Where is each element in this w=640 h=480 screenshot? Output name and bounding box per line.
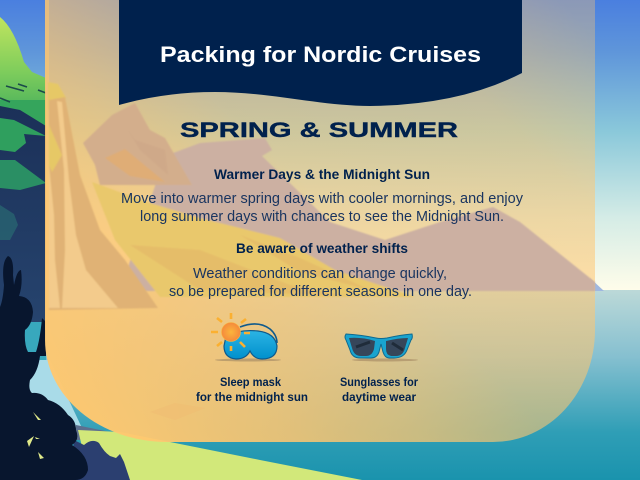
caption: sleep mask [196,375,308,404]
body text: weather: so be prepared for different seasons in one day. [169,283,472,300]
translucent content panel [45,0,595,442]
dock reflection [150,403,205,420]
body text: weather [169,265,472,300]
body text: warmer days [121,190,523,225]
title banner [119,0,522,106]
panel left edge [45,0,49,330]
caption: sunglasses: Sunglasses for [340,375,418,389]
body text: weather: Weather conditions can change quickly, [193,265,447,282]
text block: midnight sun [121,166,523,225]
far shoreline [76,425,110,440]
sea [0,290,640,480]
text block: weather shifts [169,240,472,300]
section heading: SPRING & SUMMER [180,119,458,142]
subheading: warmer days: Warmer Days & the Midnight Sun [214,166,430,182]
caption: sunglasses [340,375,418,404]
caption: sunglasses: daytime wear [342,390,416,404]
caption: sleep mask: for the midnight sun [196,390,308,404]
distant mountains [83,103,595,297]
icon: sunglasses [345,334,418,362]
sea inlet behind trees [24,322,46,362]
green hillside [0,17,46,440]
tree silhouette [0,256,88,480]
foreground green shore [78,430,362,480]
title: Packing for Nordic Cruises [160,42,481,67]
shrubs [70,440,130,480]
light water reflection [26,360,82,428]
body text: warmer days: Move into warmer spring days with cooler mornings, and enjoy [121,190,523,207]
icon: sleep mask with sun [211,313,281,362]
mountain tip beyond panel [590,278,604,291]
caption: sleep mask: Sleep mask [220,375,281,389]
sky background [0,0,640,291]
body text: warmer days: long summer days with chances to see the Midnight Sun. [140,208,504,225]
subheading: weather: Be aware of weather shifts [236,240,408,256]
waterfall cliff [48,82,158,310]
